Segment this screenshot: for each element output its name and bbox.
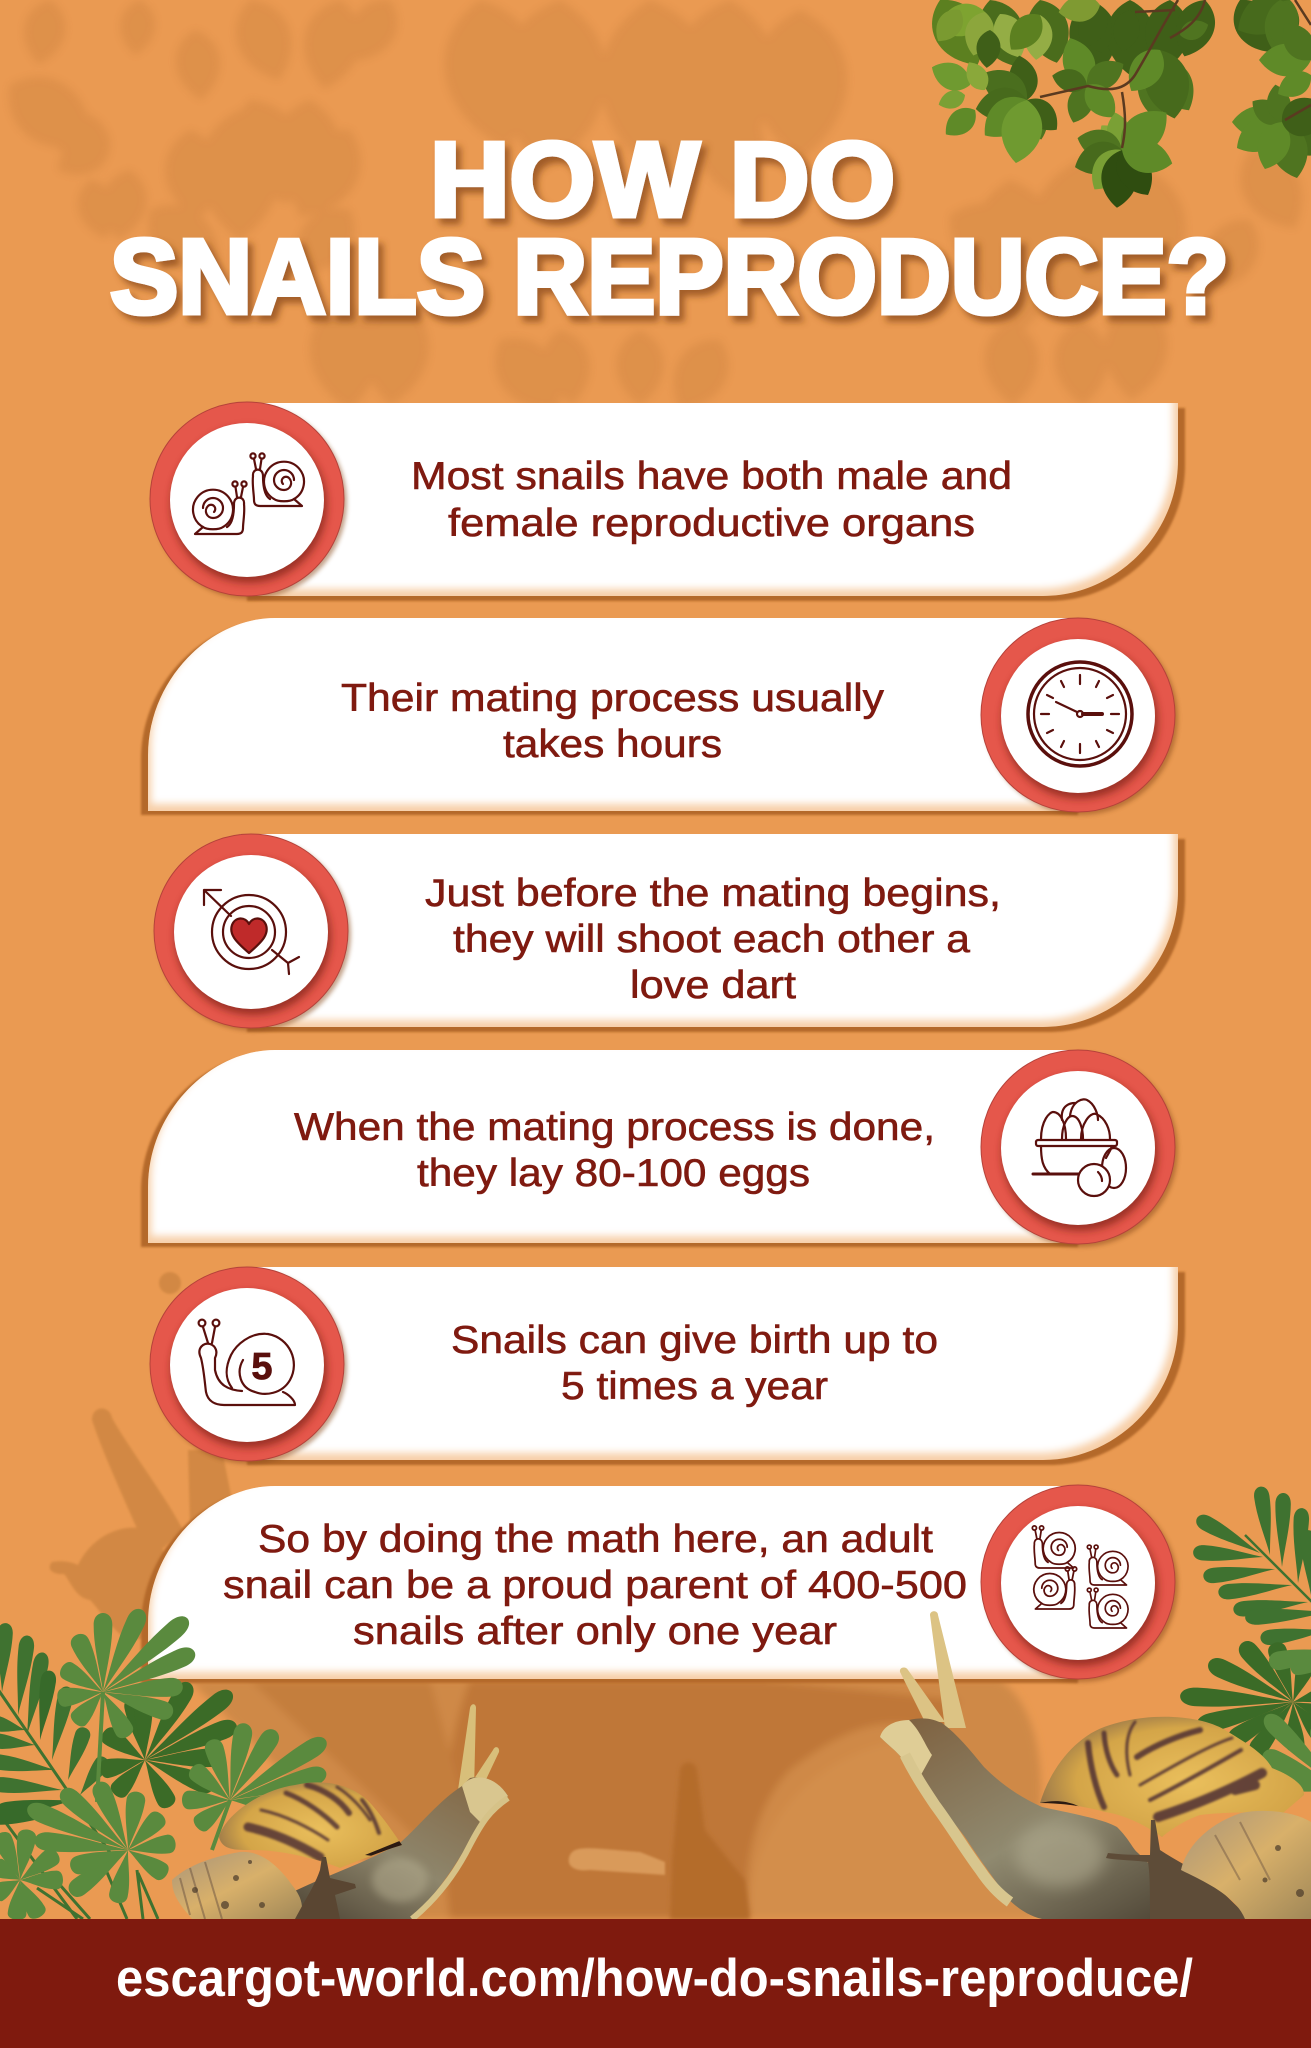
text: love dart: love dart <box>630 964 796 1007</box>
small shell <box>1181 1811 1311 1919</box>
small head <box>1106 1820 1250 1919</box>
ghost snails background <box>50 1272 1041 1919</box>
small shell <box>172 1852 302 1919</box>
light palm upper <box>56 1606 198 1802</box>
text: both organs <box>411 455 1012 545</box>
snail right <box>880 1611 1311 1919</box>
text: both organs: female reproductive organs <box>448 502 975 545</box>
text: eggs: When the mating process is done, <box>294 1106 935 1149</box>
fern left <box>0 1623 158 1919</box>
text: eggs <box>294 1106 935 1195</box>
footer bar <box>0 1919 1311 2048</box>
text: proud parent: snail can be a proud parent of 400-500 <box>223 1564 967 1607</box>
title: HOW DO <box>430 121 895 239</box>
ghost: left snail stalks and head <box>50 1272 232 1640</box>
text: love dart <box>425 872 1001 1007</box>
icon ring: clock <box>981 618 1178 815</box>
text: proud parent: snails after only one year <box>353 1610 837 1653</box>
text: eggs: they lay 80-100 eggs <box>417 1152 810 1195</box>
text: five births: Snails can give birth up to <box>451 1319 938 1362</box>
text: proud parent: So by doing the math here, an adult <box>258 1518 933 1561</box>
icon ring: two snails <box>150 402 347 599</box>
text: mating hours: takes hours <box>503 723 722 766</box>
body <box>880 1718 1241 1919</box>
light palm corner <box>0 1828 63 1921</box>
small head <box>295 1857 356 1919</box>
big shell <box>1040 1716 1304 1837</box>
snail left <box>172 1704 508 1919</box>
text: love dart: Just before the mating begins, <box>425 872 1001 915</box>
tree branch top right <box>920 0 1311 209</box>
panel: five births <box>150 1260 1185 1465</box>
light palm right <box>1259 1641 1311 1799</box>
plants bottom right <box>1180 1486 1311 1799</box>
big shell <box>219 1782 402 1868</box>
eye stalks <box>458 1704 499 1790</box>
panel: eggs <box>141 1043 1178 1247</box>
dark palm right <box>1180 1637 1311 1760</box>
icon ring: love dart target <box>154 834 351 1031</box>
icon ring: snail with five: 5 <box>251 1346 273 1388</box>
panel: proud parent <box>141 1479 1178 1683</box>
panel: both organs <box>150 396 1185 601</box>
text: mating hours: Their mating process usually <box>341 677 885 720</box>
light palm right <box>182 1722 331 1850</box>
dark palm <box>98 1678 240 1811</box>
fern right <box>1193 1486 1311 1646</box>
icon ring: egg basket <box>981 1050 1178 1247</box>
eye stalks <box>900 1611 966 1728</box>
title <box>110 121 1229 336</box>
body <box>250 1777 508 1919</box>
light palm lower <box>24 1779 177 1905</box>
plants bottom left <box>0 1606 331 1921</box>
text: mating hours <box>341 677 885 766</box>
ghost leaves background <box>0 0 1311 427</box>
panel: mating hours <box>141 611 1178 815</box>
text: five births <box>451 1319 938 1408</box>
icon ring: four snails <box>981 1485 1178 1682</box>
panel: love dart <box>154 827 1185 1032</box>
icon ring: snail with five <box>150 1267 347 1464</box>
title: SNAILS REPRODUCE? <box>110 218 1229 336</box>
ghost: body band <box>189 1680 1041 1919</box>
text: both organs: Most snails have both male and <box>411 455 1012 498</box>
footer url: escargot-world.com/how-do-snails-reproduce/ <box>116 1949 1193 2008</box>
text: love dart: they will shoot each other a <box>453 918 970 961</box>
text: proud parent <box>223 1518 967 1653</box>
text: five births: 5 times a year <box>561 1365 828 1408</box>
